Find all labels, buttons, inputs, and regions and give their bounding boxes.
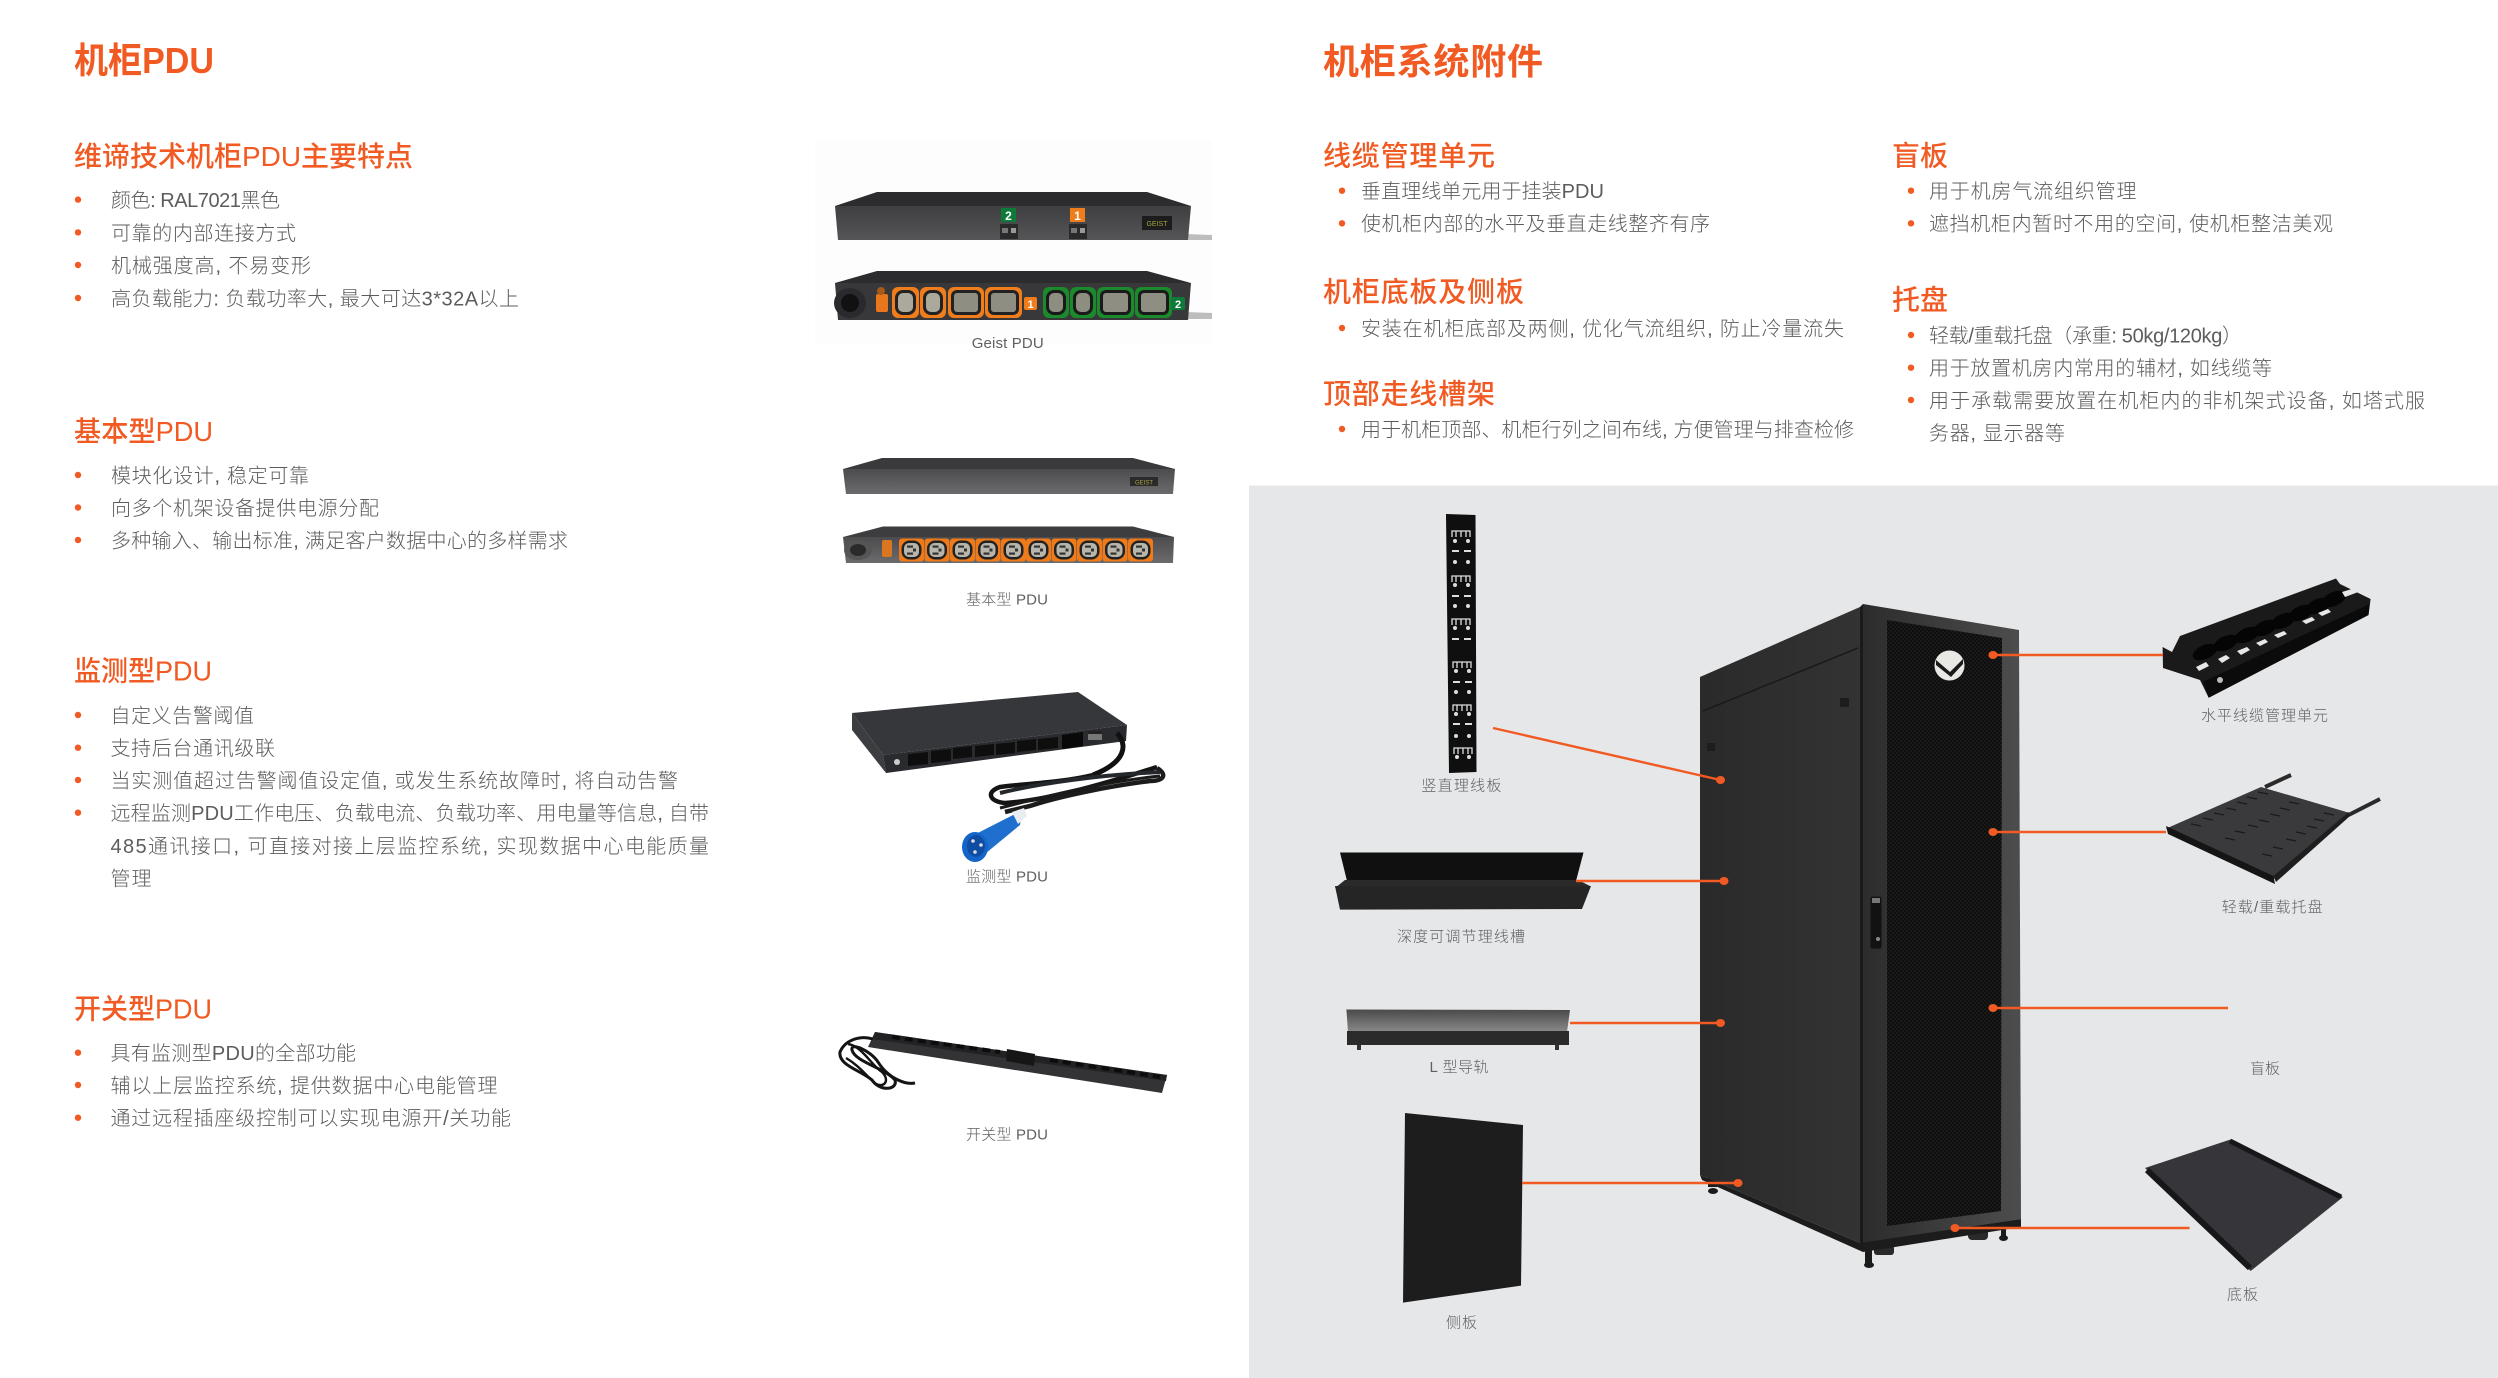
bullet list: top cable tray: 用于机柜顶部、机柜行列之间布线, 方便管理与排查检修 — [1361, 418, 1854, 442]
bullet list: base and side panels: 安装在机柜底部及两侧, 优化气流组织, 防止冷量流失 — [1361, 318, 1844, 340]
image: Geist PDU: 2 — [1175, 299, 1181, 311]
bullet list: tray: 用于放置机房内常用的辅材, 如线缆等 — [1929, 357, 2272, 380]
callout lines: left accessories to cabinet — [1493, 728, 1742, 1187]
caption: side panel: 侧板 — [1446, 1314, 1477, 1332]
caption: base plate: 底板 — [2227, 1286, 2258, 1304]
image: vertical cable manager strip — [1446, 514, 1476, 773]
bullet list: monitored PDU: 当实测值超过告警阈值设定值, 或发生系统故障时, 将自动告警 — [110, 770, 678, 792]
bullet list: monitored PDU: 远程监测PDU工作电压、负载电流、负载功率、用电量等信息, 自带 — [110, 802, 709, 825]
bullet list: cable management — [1339, 180, 1710, 236]
heading: base and side panels: 机柜底板及侧板 — [1323, 276, 1524, 308]
bullet list: cable management: 垂直理线单元用于挂装PDU — [1361, 180, 1604, 203]
bullet list: monitored PDU: 支持后台通讯级联 — [110, 737, 275, 760]
image: server cabinet — [1700, 604, 2021, 1268]
image: Geist PDU — [815, 140, 1212, 345]
bullet list: monitored PDU: 485通讯接口, 可直接对接上层监控系统, 实现数据中心电能质量 — [110, 835, 709, 858]
bullet list: tray — [1908, 324, 2425, 445]
caption: horizontal cable management unit: 水平线缆管理单元 — [2201, 708, 2328, 724]
bullet list: blanking panel — [1908, 180, 2333, 236]
callout lines: right accessories to cabinet — [1950, 651, 2228, 1232]
panel: Vertiv rack PDU key features — [74, 141, 519, 310]
bullet list: basic PDU: 多种输入、输出标准, 满足客户数据中心的多样需求 — [111, 530, 568, 552]
bullet list: tray: 务器, 显示器等 — [1929, 422, 2065, 445]
bullet list: key features: 机械强度高, 不易变形 — [111, 254, 311, 278]
image: L-shaped rail — [1346, 1010, 1570, 1050]
heading: tray: 托盘 — [1892, 284, 1948, 316]
bullet list: tray: 用于承载需要放置在机柜内的非机架式设备, 如塔式服 — [1929, 390, 2425, 412]
image: side panel — [1403, 1113, 1523, 1303]
image: base plate — [2145, 1140, 2343, 1271]
panel: tray — [1892, 284, 2425, 445]
image: horizontal cable management unit — [2163, 578, 2371, 698]
bullet list: monitored PDU — [75, 704, 709, 890]
icon: Vertiv logo — [1934, 650, 1964, 680]
heading: cable management: 线缆管理单元 — [1323, 140, 1495, 172]
caption: Geist PDU: Geist PDU — [972, 335, 1044, 352]
image: basic PDU: GEIST — [1135, 480, 1153, 486]
bullet list: monitored PDU: 管理 — [110, 868, 152, 890]
panel: base and side panels — [1323, 276, 1844, 340]
heading: key features: 维谛技术机柜PDU主要特点 — [74, 141, 413, 172]
image: switched PDU — [840, 1032, 1167, 1093]
panel: switched PDU — [74, 994, 511, 1130]
heading: monitored PDU: 监测型PDU — [74, 656, 212, 686]
bullet list: key features: 可靠的内部连接方式 — [111, 222, 296, 245]
bullet list: cable management: 使机柜内部的水平及垂直走线整齐有序 — [1361, 213, 1710, 236]
bullet list: switched PDU — [75, 1042, 511, 1130]
bullet list: basic PDU: 向多个机架设备提供电源分配 — [111, 497, 379, 520]
caption: L-shaped rail: L 型导轨 — [1430, 1059, 1488, 1076]
panel: basic PDU — [74, 416, 568, 552]
image: basic PDU — [843, 458, 1175, 563]
heading: blanking panel: 盲板 — [1892, 140, 1948, 172]
bullet list: key features: 颜色: RAL7021黑色 — [111, 189, 280, 212]
bullet list: monitored PDU: 自定义告警阈值 — [110, 704, 254, 728]
caption: monitored PDU: 监测型 PDU — [966, 868, 1048, 886]
bullet list: basic PDU: 模块化设计, 稳定可靠 — [111, 464, 309, 488]
image: Geist PDU: 1 — [1074, 209, 1081, 223]
bullet list: switched PDU: 通过远程插座级控制可以实现电源开/关功能 — [110, 1107, 511, 1130]
image: depth adjustable cable trough — [1335, 852, 1591, 910]
caption: light/heavy duty tray: 轻载/重载托盘 — [2222, 899, 2323, 916]
bullet list: key features: 高负载能力: 负载功率大, 最大可达3*32A以上 — [111, 288, 519, 310]
panel: monitored PDU — [74, 656, 709, 890]
caption: vertical cable manager: 竖直理线板 — [1421, 778, 1501, 794]
bullet list: blanking panel: 用于机房气流组织管理 — [1929, 180, 2136, 203]
image: light/heavy duty tray — [2166, 775, 2380, 884]
caption: depth adjustable cable trough: 深度可调节理线槽 — [1397, 928, 1525, 946]
heading: switched PDU: 开关型PDU — [74, 994, 212, 1024]
panel: blanking panel — [1892, 140, 2333, 236]
caption: basic PDU: 基本型 PDU — [966, 592, 1048, 608]
image: Geist PDU: 2 — [1005, 209, 1012, 223]
bullet list: switched PDU: 具有监测型PDU的全部功能 — [110, 1042, 356, 1065]
bullet list: tray: 轻载/重载托盘（承重: 50kg/120kg） — [1929, 324, 2242, 348]
bullet list: switched PDU: 辅以上层监控系统, 提供数据中心电能管理 — [110, 1074, 498, 1098]
title: 机柜PDU: 机柜PDU — [74, 40, 214, 81]
caption: switched PDU: 开关型 PDU — [966, 1126, 1048, 1144]
image: Geist PDU: 1 — [1027, 299, 1034, 311]
image: monitored PDU — [852, 692, 1163, 862]
panel: top cable tray — [1323, 378, 1854, 442]
bullet list: blanking panel: 遮挡机柜内暂时不用的空间, 使机柜整洁美观 — [1929, 213, 2333, 236]
caption: blanking panel: 盲板 — [2250, 1060, 2280, 1078]
heading: basic PDU: 基本型PDU — [74, 416, 213, 447]
grey accessories panel background — [1249, 486, 2498, 1378]
title: 机柜系统附件: 机柜系统附件 — [1323, 41, 1543, 82]
image: Geist PDU: GEIST — [1146, 221, 1168, 228]
bullet list: basic PDU — [75, 464, 568, 552]
bullet list: key features — [75, 189, 519, 310]
panel: cable management unit — [1323, 140, 1710, 236]
heading: top cable tray: 顶部走线槽架 — [1323, 378, 1495, 410]
